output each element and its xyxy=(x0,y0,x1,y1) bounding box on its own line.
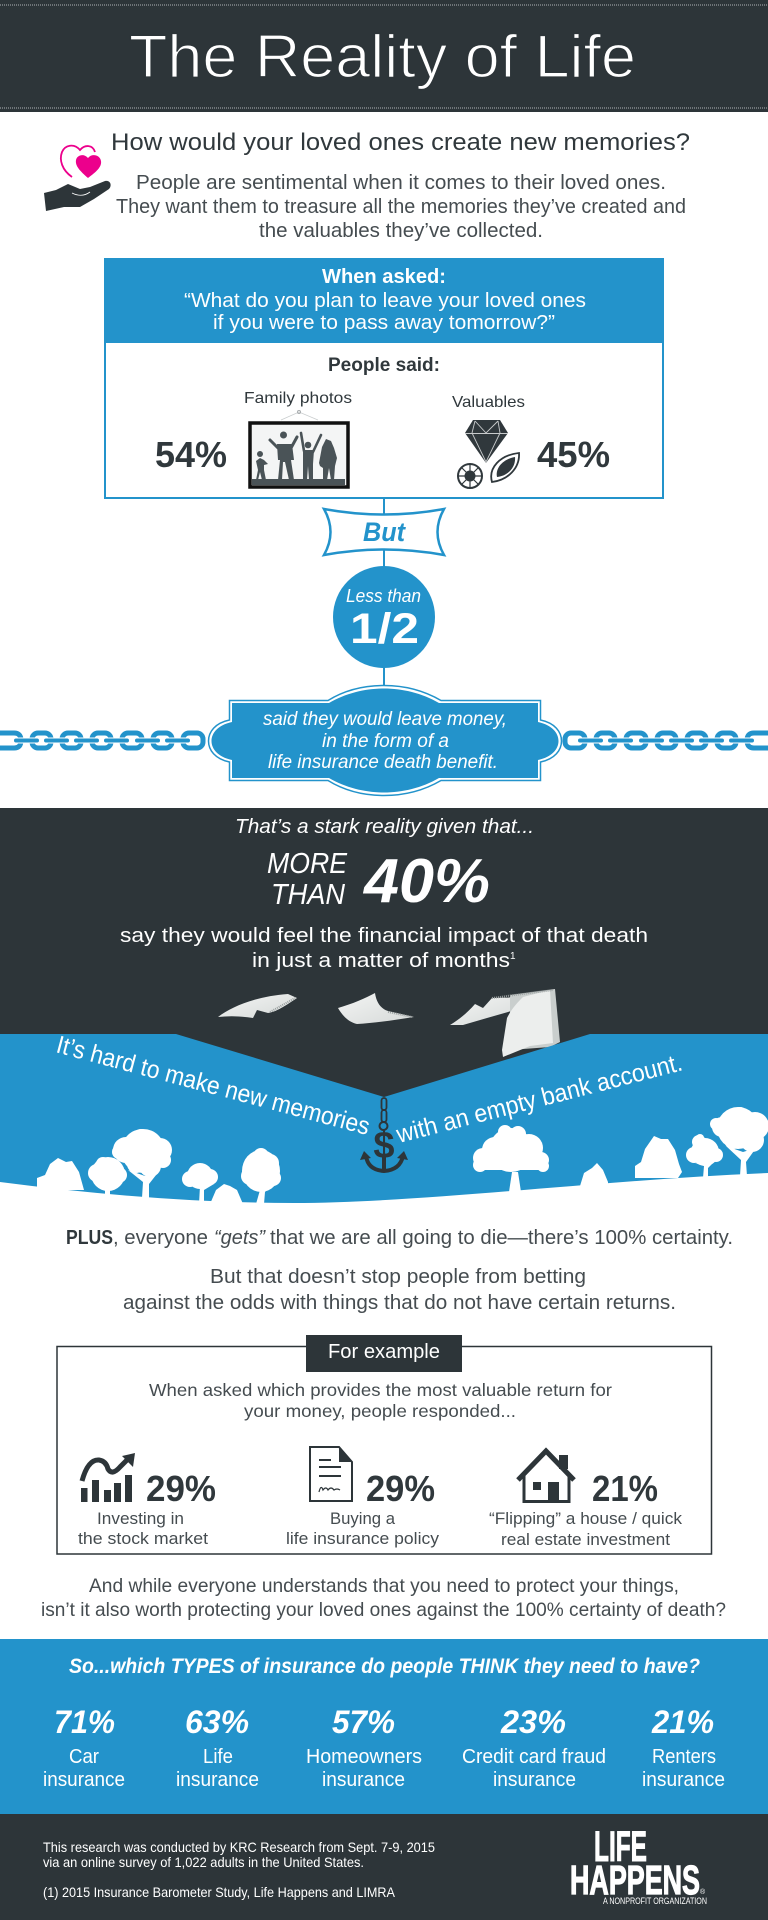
panel: footer xyxy=(0,1814,768,1920)
text: return question: your money, people responded... xyxy=(244,1401,516,1421)
text: financial impact: in just a matter of months xyxy=(252,950,510,972)
text block: intro: They want them to treasure all the memories they’ve created and xyxy=(116,196,686,218)
text: methodology and source: via an online survey of 1,022 adults in the United States. xyxy=(43,1854,364,1870)
logo: Life Happens: ® xyxy=(700,1888,706,1896)
text: empty bank account: with an empty bank account. xyxy=(393,1049,685,1149)
stat: credit card fraud insurance: insurance xyxy=(493,1769,576,1791)
stat: flipping a house: 21% xyxy=(592,1468,658,1509)
icon: diamond and gems xyxy=(458,420,519,488)
badge: less than 1/2: Less than xyxy=(346,586,421,606)
icon: stock chart xyxy=(81,1453,135,1502)
text: methodology and source: This research was conducted by KRC Research from Sept. 7-9, 2015 xyxy=(43,1839,435,1855)
stat: flipping a house xyxy=(489,1451,683,1549)
stat: credit card fraud insurance: 23% xyxy=(500,1704,566,1740)
stat: credit card fraud insurance: Credit card fraud xyxy=(462,1746,606,1768)
text: stark reality: That’s a stark reality given that... xyxy=(235,816,534,838)
panel: title banner xyxy=(0,0,768,112)
stat: car insurance: insurance xyxy=(43,1769,125,1791)
text: when asked: When asked: xyxy=(322,266,446,288)
stat: homeowners insurance: 57% xyxy=(332,1704,395,1740)
stat: car insurance: Car xyxy=(69,1746,99,1768)
text: financial impact: 1 xyxy=(510,951,516,962)
stat: renters insurance: insurance xyxy=(642,1769,725,1791)
text: hard to make new memories: It’s hard to make new memories xyxy=(53,1031,373,1141)
text: financial impact: say they would feel the financial impact of that death xyxy=(120,925,648,947)
panel: plaque xyxy=(208,686,562,796)
icon: dollar anchor xyxy=(360,1098,408,1171)
panel: for example xyxy=(57,1335,712,1554)
stat: stock market: the stock market xyxy=(78,1529,208,1548)
text: PLUS certainty: that we are all going to die—there’s 100% certainty. xyxy=(270,1227,733,1249)
icon: framed family photo xyxy=(250,410,348,487)
text: people said: People said: xyxy=(328,355,440,376)
tag: for example: For example xyxy=(328,1341,440,1363)
stat: homeowners insurance xyxy=(306,1704,422,1791)
text: PLUS certainty xyxy=(66,1227,733,1249)
logo: Life Happens: A NONPROFIT ORGANIZATION xyxy=(603,1896,707,1906)
heading: new memories: How would your loved ones create new memories? xyxy=(111,129,690,156)
title: The Reality of Life xyxy=(129,23,636,90)
text: betting against the odds: against the odds with things that do not have certain returns. xyxy=(123,1292,676,1314)
connector line xyxy=(383,498,385,686)
text: protecting loved ones: And while everyone understands that you need to protect your things, xyxy=(89,1575,679,1597)
tag: for example xyxy=(306,1335,462,1372)
stat: family photos: Family photos xyxy=(244,390,352,407)
stat: life insurance policy: Buying a xyxy=(330,1509,396,1528)
stat: valuables xyxy=(452,394,610,488)
stat: homeowners insurance: Homeowners xyxy=(306,1746,422,1768)
text: PLUS certainty: , everyone xyxy=(113,1227,208,1249)
stat: family photos: 54% xyxy=(155,434,227,475)
text: PLUS certainty: PLUS xyxy=(66,1227,113,1249)
banner: But xyxy=(324,509,444,555)
panel: insurance types xyxy=(0,1639,768,1814)
stat: renters insurance: Renters xyxy=(652,1746,716,1768)
banner: But: But xyxy=(363,517,406,547)
text: protecting loved ones: isn’t it also worth protecting your loved ones against the 100% certainty of death? xyxy=(41,1599,726,1621)
icon: policy document xyxy=(310,1447,352,1501)
icon: house xyxy=(518,1451,574,1502)
stat: renters insurance xyxy=(642,1704,725,1791)
stat: flipping a house: real estate investment xyxy=(501,1530,670,1549)
stat: more than 40% xyxy=(267,847,490,916)
stat: more than 40%: 40% xyxy=(362,847,490,916)
panel: plaque: in the form of a xyxy=(322,731,449,752)
icon: right chain xyxy=(565,733,768,748)
stat: renters insurance: 21% xyxy=(651,1704,714,1740)
icon: hand holding hearts xyxy=(44,146,111,211)
logo: Life Happens xyxy=(570,1823,707,1906)
stat: stock market xyxy=(78,1453,216,1548)
stat: life insurance: 63% xyxy=(185,1704,249,1740)
logo: Life Happens: LIFE xyxy=(594,1823,647,1871)
stat: car insurance xyxy=(43,1704,125,1791)
heading: types of insurance: So...which TYPES of insurance do people THINK they need to have? xyxy=(69,1655,700,1678)
text block: intro: the valuables they’ve collected. xyxy=(259,220,543,242)
stat: life insurance: Life xyxy=(203,1746,233,1768)
text: betting against the odds: But that doesn’t stop people from betting xyxy=(210,1266,586,1288)
text: question xyxy=(184,290,586,334)
stat: life insurance policy: 29% xyxy=(366,1468,435,1509)
stat: homeowners insurance: insurance xyxy=(322,1769,405,1791)
text block: intro xyxy=(116,172,686,242)
text: question: “What do you plan to leave your loved ones xyxy=(184,290,586,312)
stat: life insurance policy xyxy=(286,1447,440,1548)
stat: life insurance: insurance xyxy=(176,1769,259,1791)
text: return question xyxy=(149,1380,612,1421)
stat: more than 40%: MORE xyxy=(267,848,348,880)
text: protecting loved ones xyxy=(41,1575,726,1621)
stat: credit card fraud insurance xyxy=(462,1704,606,1791)
text: methodology and source xyxy=(43,1839,435,1900)
icon: flying calendar pages xyxy=(218,989,560,1057)
panel: plaque: said they would leave money, xyxy=(263,709,507,730)
stat: life insurance policy: life insurance policy xyxy=(286,1529,440,1548)
panel: plaque: life insurance death benefit. xyxy=(268,752,498,773)
illustration: trees and hill xyxy=(0,1107,768,1232)
panel: dark section background xyxy=(0,808,768,1103)
stat: more than 40%: THAN xyxy=(271,879,345,911)
stat: valuables: Valuables xyxy=(452,394,525,411)
badge: less than 1/2: 1/2 xyxy=(350,605,419,653)
logo: Life Happens: HAPPENS xyxy=(570,1857,700,1903)
stat: life insurance xyxy=(176,1704,259,1791)
stat: valuables: 45% xyxy=(537,434,610,475)
stat: stock market: 29% xyxy=(146,1468,216,1509)
text: betting against the odds xyxy=(123,1266,676,1314)
text block: intro: People are sentimental when it comes to their loved ones. xyxy=(136,172,666,194)
badge: less than 1/2 xyxy=(333,566,435,668)
text: question: if you were to pass away tomorrow?” xyxy=(213,312,555,334)
text: PLUS certainty: “gets” xyxy=(214,1227,266,1249)
stat: family photos xyxy=(155,390,352,487)
text: return question: When asked which provides the most valuable return for xyxy=(149,1380,612,1400)
text: methodology and source: (1) 2015 Insurance Barometer Study, Life Happens and LIMRA xyxy=(43,1884,396,1900)
stat: car insurance: 71% xyxy=(54,1704,115,1740)
text: financial impact xyxy=(120,925,648,972)
stat: flipping a house: “Flipping” a house / quick xyxy=(489,1509,683,1528)
icon: left chain xyxy=(0,733,203,748)
icon: dollar anchor: $ xyxy=(373,1125,395,1167)
panel: blue memories band xyxy=(0,1034,768,1210)
panel: survey question xyxy=(104,258,664,498)
stat: stock market: Investing in xyxy=(97,1509,184,1528)
